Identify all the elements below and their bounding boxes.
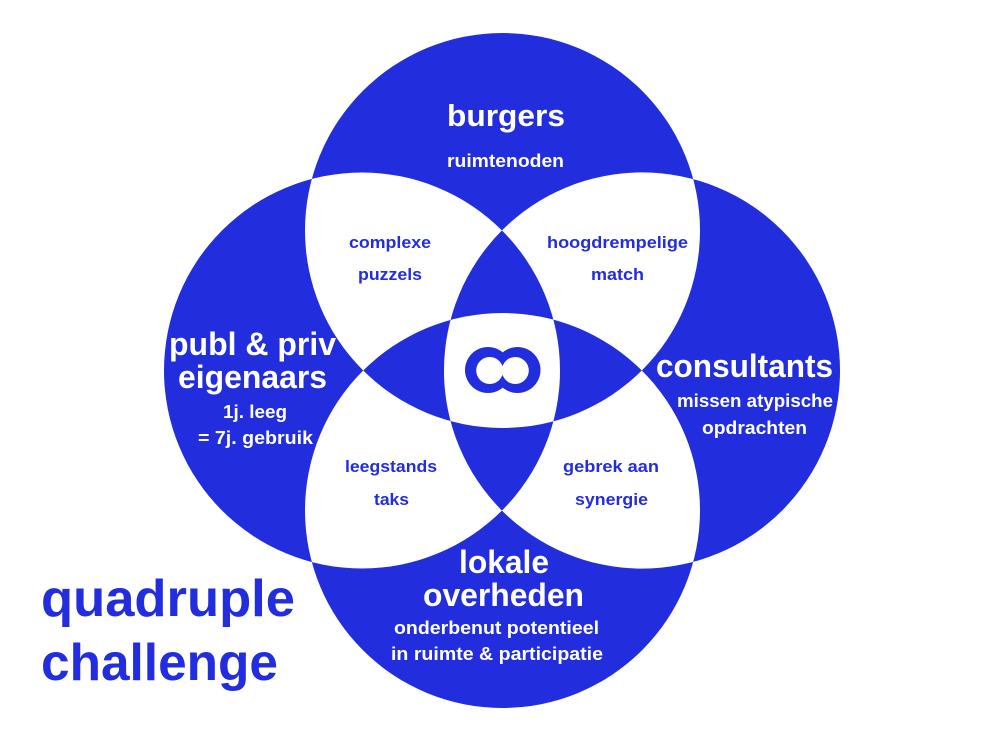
- panel: publ &amp; priv eigenaars: [169, 326, 336, 448]
- overlap label: complexe puzzels: [349, 233, 431, 284]
- overlap label: hoogdrempelige match: [547, 233, 688, 284]
- panel: lokale overheden: overheden: [423, 577, 584, 613]
- overlap label: hoogdrempelige match: match: [591, 265, 644, 284]
- panel: lokale overheden: [391, 544, 603, 664]
- overlap label: complexe puzzels: puzzels: [358, 265, 422, 284]
- panel: publ &amp; priv eigenaars: publ & priv: [169, 326, 336, 362]
- overlap label: gebrek aan synergie: [563, 457, 659, 509]
- panel: consultants: [656, 348, 833, 438]
- panel: publ &amp; priv eigenaars: 1j. leeg: [223, 402, 287, 422]
- overlap label: gebrek aan synergie: synergie: [575, 490, 648, 509]
- icon: central infinity logo: [465, 347, 540, 393]
- panel: consultants: missen atypische: [677, 391, 833, 411]
- panel: burgers: [447, 98, 565, 171]
- panel: publ &amp; priv eigenaars: eigenaars: [178, 359, 327, 395]
- overlap label: complexe puzzels: complexe: [349, 233, 431, 252]
- panel: lokale overheden: onderbenut potentieel: [394, 618, 599, 638]
- panel: lokale overheden: in ruimte & participatie: [391, 644, 603, 664]
- overlap label: leegstands taks: leegstands: [345, 457, 437, 476]
- panel: publ &amp; priv eigenaars: = 7j. gebruik: [198, 428, 314, 448]
- overlap label: hoogdrempelige match: hoogdrempelige: [547, 233, 688, 252]
- title: quadruple challenge: quadruple: [41, 570, 295, 628]
- overlap label: leegstands taks: [345, 457, 437, 509]
- overlap label: gebrek aan synergie: gebrek aan: [563, 457, 659, 476]
- overlap label: leegstands taks: taks: [374, 490, 409, 509]
- panel: consultants: opdrachten: [702, 418, 807, 438]
- panel: burgers: ruimtenoden: [447, 151, 564, 171]
- title: quadruple challenge: challenge: [41, 634, 278, 692]
- panel: burgers: burgers: [447, 98, 565, 133]
- title: quadruple challenge: [41, 570, 295, 692]
- panel: consultants: consultants: [656, 348, 833, 384]
- venn diagram: four overlapping circles: [164, 33, 840, 708]
- panel: lokale overheden: lokale: [459, 544, 549, 580]
